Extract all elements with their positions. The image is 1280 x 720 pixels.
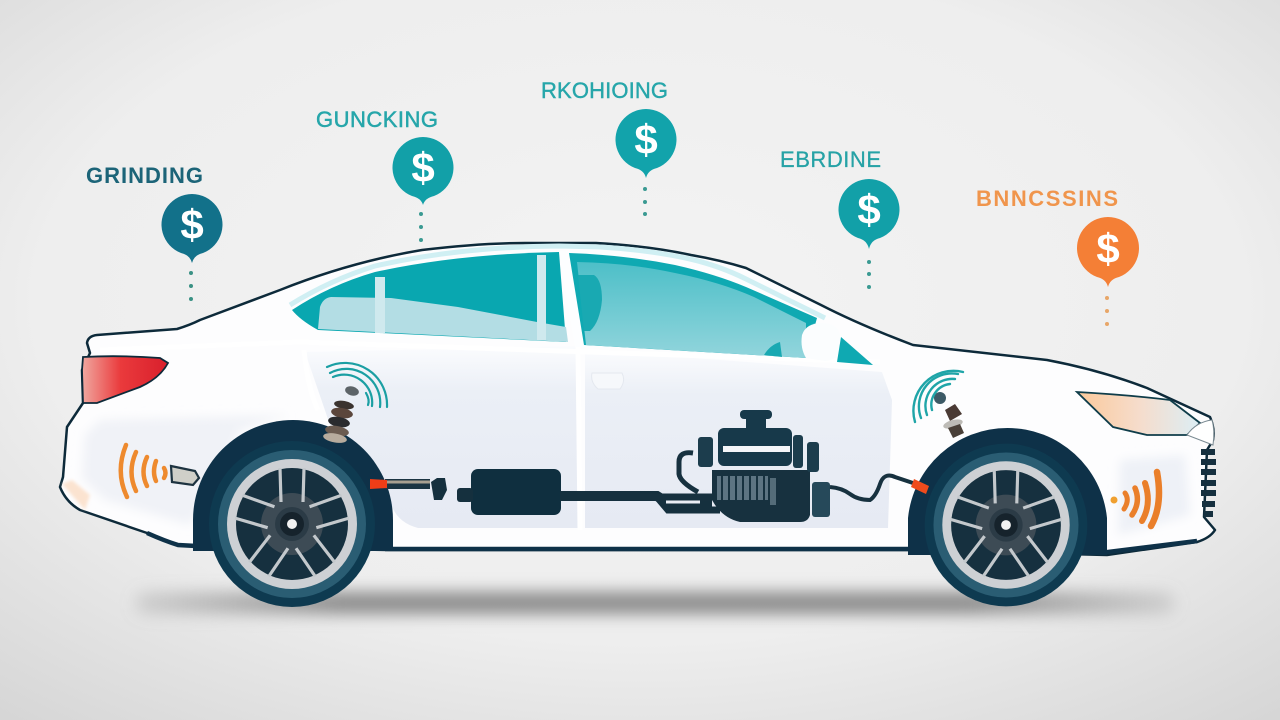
rear wheel arch xyxy=(193,420,393,551)
rocker line xyxy=(147,533,1197,553)
front hose xyxy=(830,476,913,500)
pin: grinding cost: $ xyxy=(180,201,204,248)
roof frame xyxy=(290,246,825,318)
label: GUNCKING: GUNCKING xyxy=(316,107,438,132)
rear bumper glow xyxy=(62,480,90,510)
label: GRINDING: GRINDING xyxy=(86,163,203,188)
front noise waves orange xyxy=(1110,472,1159,526)
pin: guncking cost xyxy=(392,137,453,242)
label: EBRDINE: EBRDINE xyxy=(780,147,881,172)
rear noise waves orange xyxy=(121,445,166,497)
car xyxy=(60,243,1216,555)
label: BNNCSSINS: BNNCSSINS xyxy=(976,186,1118,211)
label: RKOHIOING: RKOHIOING xyxy=(541,78,668,103)
engine top cap xyxy=(740,410,772,419)
exhaust red tip xyxy=(370,479,387,489)
windshield sliver xyxy=(837,337,873,365)
pin: guncking cost: $ xyxy=(411,144,435,191)
tail pipe xyxy=(385,479,430,489)
rear suspension spring xyxy=(322,385,360,445)
pipe joint xyxy=(431,478,447,500)
rear door panel xyxy=(305,346,578,528)
pin: bnncssins cost: $ xyxy=(1096,225,1120,272)
car body xyxy=(60,243,1215,555)
rear side window xyxy=(292,252,568,342)
front fender shading xyxy=(1118,455,1190,535)
pin: ebrdine cost: $ xyxy=(857,186,881,233)
pin: bnncssins cost xyxy=(1077,217,1139,326)
pin: rkohioing cost xyxy=(616,109,677,216)
engine cylinders xyxy=(698,437,713,467)
pin: ebrdine cost xyxy=(839,179,900,289)
rear noise waves teal xyxy=(327,363,387,407)
front suspension spring xyxy=(934,392,964,438)
front door panel xyxy=(585,350,892,528)
front noise waves teal xyxy=(913,371,963,422)
body creases xyxy=(100,342,880,530)
front side window xyxy=(569,253,817,358)
engine lower block xyxy=(712,470,810,522)
engine head xyxy=(718,428,792,466)
front hose tip xyxy=(911,479,929,494)
rear wheel xyxy=(209,441,375,607)
pin: grinding cost xyxy=(161,194,222,301)
front wheel arch xyxy=(908,428,1107,555)
muffler xyxy=(471,469,561,515)
exhaust and muffler xyxy=(370,469,720,515)
rear quarter shading xyxy=(82,415,290,525)
engine xyxy=(640,410,929,522)
front nose xyxy=(1187,420,1214,445)
door pillar xyxy=(559,251,587,347)
headlight xyxy=(1077,392,1200,435)
front wheel xyxy=(925,444,1087,606)
door handle xyxy=(592,373,624,389)
engine hose xyxy=(679,453,698,492)
muffler pipe xyxy=(560,496,712,503)
pin: rkohioing cost: $ xyxy=(634,116,658,163)
rear lamp tube xyxy=(171,466,199,485)
tail light xyxy=(82,356,168,403)
front grille xyxy=(1201,452,1216,514)
ground shadow xyxy=(135,592,1175,614)
side mirror xyxy=(802,323,841,361)
